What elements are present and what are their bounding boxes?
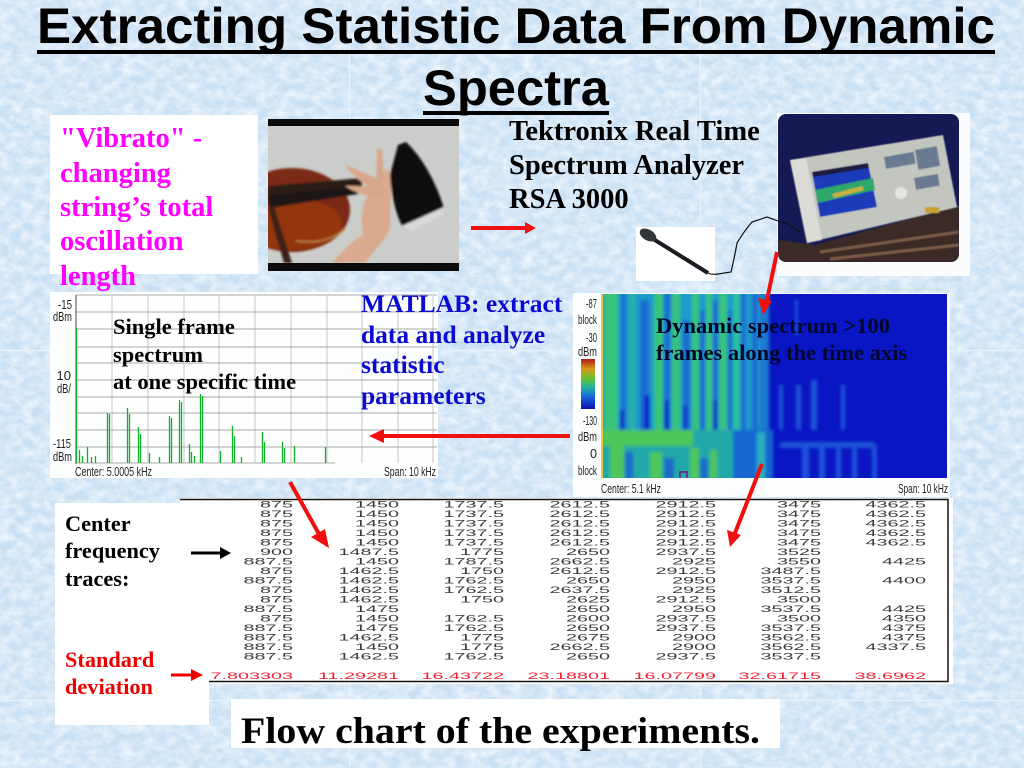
panel: data table: 2612.5 (550, 528, 610, 538)
panel: data table: 875 (260, 595, 293, 605)
image: violin hand (268, 119, 459, 271)
panel: data table: 2912.5 (656, 519, 716, 529)
spectrogram (600, 290, 947, 482)
panel: data table: 2912.5 (656, 538, 716, 548)
panel: data table: 2937.5 (656, 623, 716, 633)
panel: data table: 2662.5 (550, 557, 610, 567)
panel: data table: 875 (260, 538, 293, 548)
panel: data table: 1775 (460, 633, 504, 643)
panel: data table: 4362.5 (866, 500, 926, 510)
panel: data table: 1450 (355, 557, 399, 567)
panel: data table: 1450 (355, 528, 399, 538)
cable (708, 217, 800, 274)
panel: data table: 2950 (672, 604, 716, 614)
panel: table row labels (55, 503, 209, 725)
arrow: violin to microphone (471, 222, 536, 234)
standard deviation row: 23.18801 (528, 671, 610, 681)
panel: data table: 2612.5 (550, 509, 610, 519)
panel: data table: 4362.5 (866, 538, 926, 548)
panel: data table: 2912.5 (656, 509, 716, 519)
text: single frame caption: Single frame (113, 314, 235, 339)
panel: data table: 4362.5 (866, 519, 926, 529)
panel: data table: 2912.5 (656, 595, 716, 605)
text: dynamic spectrum caption (656, 313, 907, 365)
text: Tektronix analyzer: RSA 3000 (509, 184, 629, 215)
panel: data table: 1737.5 (444, 538, 504, 548)
panel: data table: 2612.5 (550, 519, 610, 529)
panel: data table: 3512.5 (761, 585, 821, 595)
panel: data table: 1462.5 (339, 566, 399, 576)
panel: data table: 1450 (355, 509, 399, 519)
panel: data table: 4337.5 (866, 642, 926, 652)
panel: data table: 1450 (355, 538, 399, 548)
standard deviation row (211, 671, 926, 681)
panel: data table: 887.5 (244, 642, 293, 652)
text: MATLAB note: MATLAB: extract (361, 289, 563, 318)
panel: data table: 2937.5 (656, 614, 716, 624)
panel: data table: 3475 (777, 538, 821, 548)
panel: data table: 1775 (460, 547, 504, 557)
chart axis labels: dBm (578, 429, 597, 444)
panel: data table: 1737.5 (444, 528, 504, 538)
panel: data table: 1450 (355, 642, 399, 652)
panel: table row labels: frequency (65, 538, 160, 563)
panel: data table: 1762.5 (444, 614, 504, 624)
title: Spectra (423, 60, 610, 116)
panel: vibrato caption: length (60, 261, 136, 292)
chart axis labels: -115 (53, 436, 71, 451)
panel: data table: 2950 (672, 576, 716, 586)
chart axis labels: 10 (57, 368, 71, 383)
panel: vibrato caption (50, 115, 258, 292)
panel: data table: 2650 (566, 652, 610, 662)
panel: data table: 2650 (566, 576, 610, 586)
panel: data table: 2925 (672, 557, 716, 567)
title (37, 0, 995, 116)
panel: data table: 3537.5 (761, 652, 821, 662)
panel: data table: 1787.5 (444, 557, 504, 567)
chart axis labels: dBm (578, 344, 597, 359)
chart axis labels: block (578, 463, 597, 478)
panel: data table: 4375 (882, 633, 926, 643)
panel: data table: 1462.5 (339, 585, 399, 595)
arrow: standard deviation pointer (171, 669, 203, 681)
panel: data table: 2625 (566, 595, 610, 605)
panel: data table: 1737.5 (444, 509, 504, 519)
panel: data table: 3487.5 (761, 566, 821, 576)
arrow: dynamic spectrum to MATLAB (369, 429, 570, 443)
panel: data table: 1450 (355, 500, 399, 510)
panel: table row labels: deviation (65, 674, 154, 699)
chart axis labels: Span: 10 kHz (898, 481, 948, 496)
panel: data table: 4362.5 (866, 528, 926, 538)
panel: data table: 875 (260, 614, 293, 624)
panel: data table: 900 (260, 547, 293, 557)
panel: data table: 2912.5 (656, 566, 716, 576)
chart axis labels: -30 (586, 330, 597, 345)
panel: vibrato caption: "Vibrato" - (60, 123, 202, 154)
panel: data table: 4350 (882, 614, 926, 624)
spectrum trace (76, 328, 326, 463)
panel: data table: 1737.5 (444, 519, 504, 529)
standard deviation row: 32.61715 (739, 671, 821, 681)
text: Tektronix analyzer: Tektronix Real Time (509, 116, 760, 147)
panel: data table: 1462.5 (339, 595, 399, 605)
panel: data table: 1462.5 (339, 576, 399, 586)
panel: data table: 2650 (566, 547, 610, 557)
chart axis labels: dB/ (57, 381, 71, 396)
panel: data table: 3525 (777, 547, 821, 557)
text: single frame caption (113, 314, 296, 394)
standard deviation row: 11.29281 (318, 671, 399, 681)
caption: flow chart (231, 699, 780, 752)
chart axis labels: block (578, 312, 597, 327)
panel: data table: 875 (260, 500, 293, 510)
panel: data table: 1487.5 (339, 547, 399, 557)
panel: data table: 3537.5 (761, 623, 821, 633)
panel: data table: 2675 (566, 633, 610, 643)
panel: data table: 4425 (882, 604, 926, 614)
text: Tektronix analyzer (509, 116, 760, 215)
standard deviation row: 7.803303 (211, 671, 293, 681)
panel: data table: 887.5 (244, 623, 293, 633)
panel: vibrato caption: changing (60, 158, 171, 189)
chart axis labels: Span: 10 kHz (384, 464, 436, 479)
panel: data table: 1775 (460, 642, 504, 652)
panel: data table: 2937.5 (656, 547, 716, 557)
chart axis labels: Center: 5.0005 kHz (75, 464, 152, 479)
panel: data table: 4375 (882, 623, 926, 633)
panel: data table: 887.5 (244, 576, 293, 586)
panel: data table: 875 (260, 519, 293, 529)
panel: data table: 2600 (566, 614, 610, 624)
panel: data table: 887.5 (244, 652, 293, 662)
text: dynamic spectrum caption: frames along the time axis (656, 340, 907, 365)
panel: data table: 3562.5 (761, 642, 821, 652)
panel: table row labels: Center (65, 511, 131, 536)
panel: data table: 1462.5 (339, 633, 399, 643)
text: single frame caption: spectrum (113, 342, 203, 367)
standard deviation row: 16.07799 (634, 671, 716, 681)
panel: data table: 2912.5 (656, 528, 716, 538)
arrow: dynamic spectrum to table (727, 464, 762, 547)
standard deviation row: 38.6962 (855, 671, 926, 681)
text: single frame caption: at one specific time (113, 369, 296, 394)
panel: table row labels: Standard (65, 647, 155, 672)
panel: data table: 1762.5 (444, 585, 504, 595)
chart axis labels: Center: 5.1 kHz (601, 481, 661, 496)
panel: data table: 2937.5 (656, 652, 716, 662)
panel: data table: 875 (260, 585, 293, 595)
chart axis labels (53, 297, 436, 479)
panel: data table: 1462.5 (339, 652, 399, 662)
panel: data table: 2650 (566, 604, 610, 614)
panel: data table: 3475 (777, 500, 821, 510)
panel: vibrato caption: string’s total (60, 192, 213, 223)
colour scale (581, 359, 595, 409)
text: MATLAB note: statistic (361, 350, 445, 379)
panel: data table: 1762.5 (444, 576, 504, 586)
panel: data table: 1475 (355, 623, 399, 633)
panel: data table: 3475 (777, 528, 821, 538)
panel: data table: 1762.5 (444, 652, 504, 662)
panel: data table: 2912.5 (656, 500, 716, 510)
panel: data table: 3537.5 (761, 576, 821, 586)
panel: data table: 4425 (882, 557, 926, 567)
panel: data table: 2900 (672, 633, 716, 643)
panel: data table: 1762.5 (444, 623, 504, 633)
chart axis labels (578, 296, 948, 496)
panel: data table: 4362.5 (866, 509, 926, 519)
icon: microphone (636, 226, 715, 281)
panel: data table: 3562.5 (761, 633, 821, 643)
arrow: analyzer to dynamic spectrum (758, 252, 777, 315)
panel: data table: 2662.5 (550, 642, 610, 652)
chart axis labels: -15 (58, 297, 72, 312)
arrow: single frame to table (290, 482, 329, 548)
panel: data table: 3500 (777, 595, 821, 605)
panel: data table: 875 (260, 509, 293, 519)
chart axis labels: dBm (53, 309, 72, 324)
panel: data table: 1475 (355, 604, 399, 614)
panel: data table (180, 498, 953, 684)
panel: data table: 2612.5 (550, 538, 610, 548)
panel: data table: 875 (260, 528, 293, 538)
standard deviation row: 16.43722 (422, 671, 504, 681)
icon: spectrum analyzer device (777, 113, 970, 276)
text: Tektronix analyzer: Spectrum Analyzer (509, 150, 744, 181)
panel: data table: 3537.5 (761, 604, 821, 614)
panel: data table: 1750 (460, 595, 504, 605)
text: MATLAB note: parameters (361, 381, 486, 410)
chart axis labels: dBm (53, 449, 72, 464)
panel: data table: 2900 (672, 642, 716, 652)
panel: data table: 887.5 (244, 557, 293, 567)
chart axis labels: -87 (586, 296, 597, 311)
text: dynamic spectrum caption: Dynamic spectrum >100 (656, 313, 890, 338)
panel: data table: 3500 (777, 614, 821, 624)
panel: data table: 1450 (355, 614, 399, 624)
panel: data table: 875 (260, 566, 293, 576)
panel: single frame spectrum chart (50, 292, 438, 479)
panel: data table: 4400 (882, 576, 926, 586)
panel: dynamic spectrum chart (573, 290, 950, 497)
panel: data table: 2612.5 (550, 500, 610, 510)
panel: data table: 1450 (355, 519, 399, 529)
panel: data table: 2637.5 (550, 585, 610, 595)
panel: data table: 1750 (460, 566, 504, 576)
panel: data table: 2925 (672, 585, 716, 595)
panel: data table: 3475 (777, 509, 821, 519)
panel: table row labels: traces: (65, 566, 129, 591)
panel: data table: 3550 (777, 557, 821, 567)
text: MATLAB note: data and analyze (361, 320, 545, 349)
arrow: black trace pointer (191, 547, 231, 559)
panel: data table: 3475 (777, 519, 821, 529)
panel: vibrato caption: oscillation (60, 226, 184, 257)
panel: data table: 1737.5 (444, 500, 504, 510)
panel: data table: 887.5 (244, 633, 293, 643)
panel: data table: 2612.5 (550, 566, 610, 576)
chart axis labels: -130 (583, 413, 597, 428)
panel: data table: 887.5 (244, 604, 293, 614)
text: MATLAB note (361, 289, 563, 410)
panel: data table: 2650 (566, 623, 610, 633)
chart axis labels: 0 (590, 446, 597, 461)
caption: flow chart: Flow chart of the experiments. (241, 711, 760, 752)
